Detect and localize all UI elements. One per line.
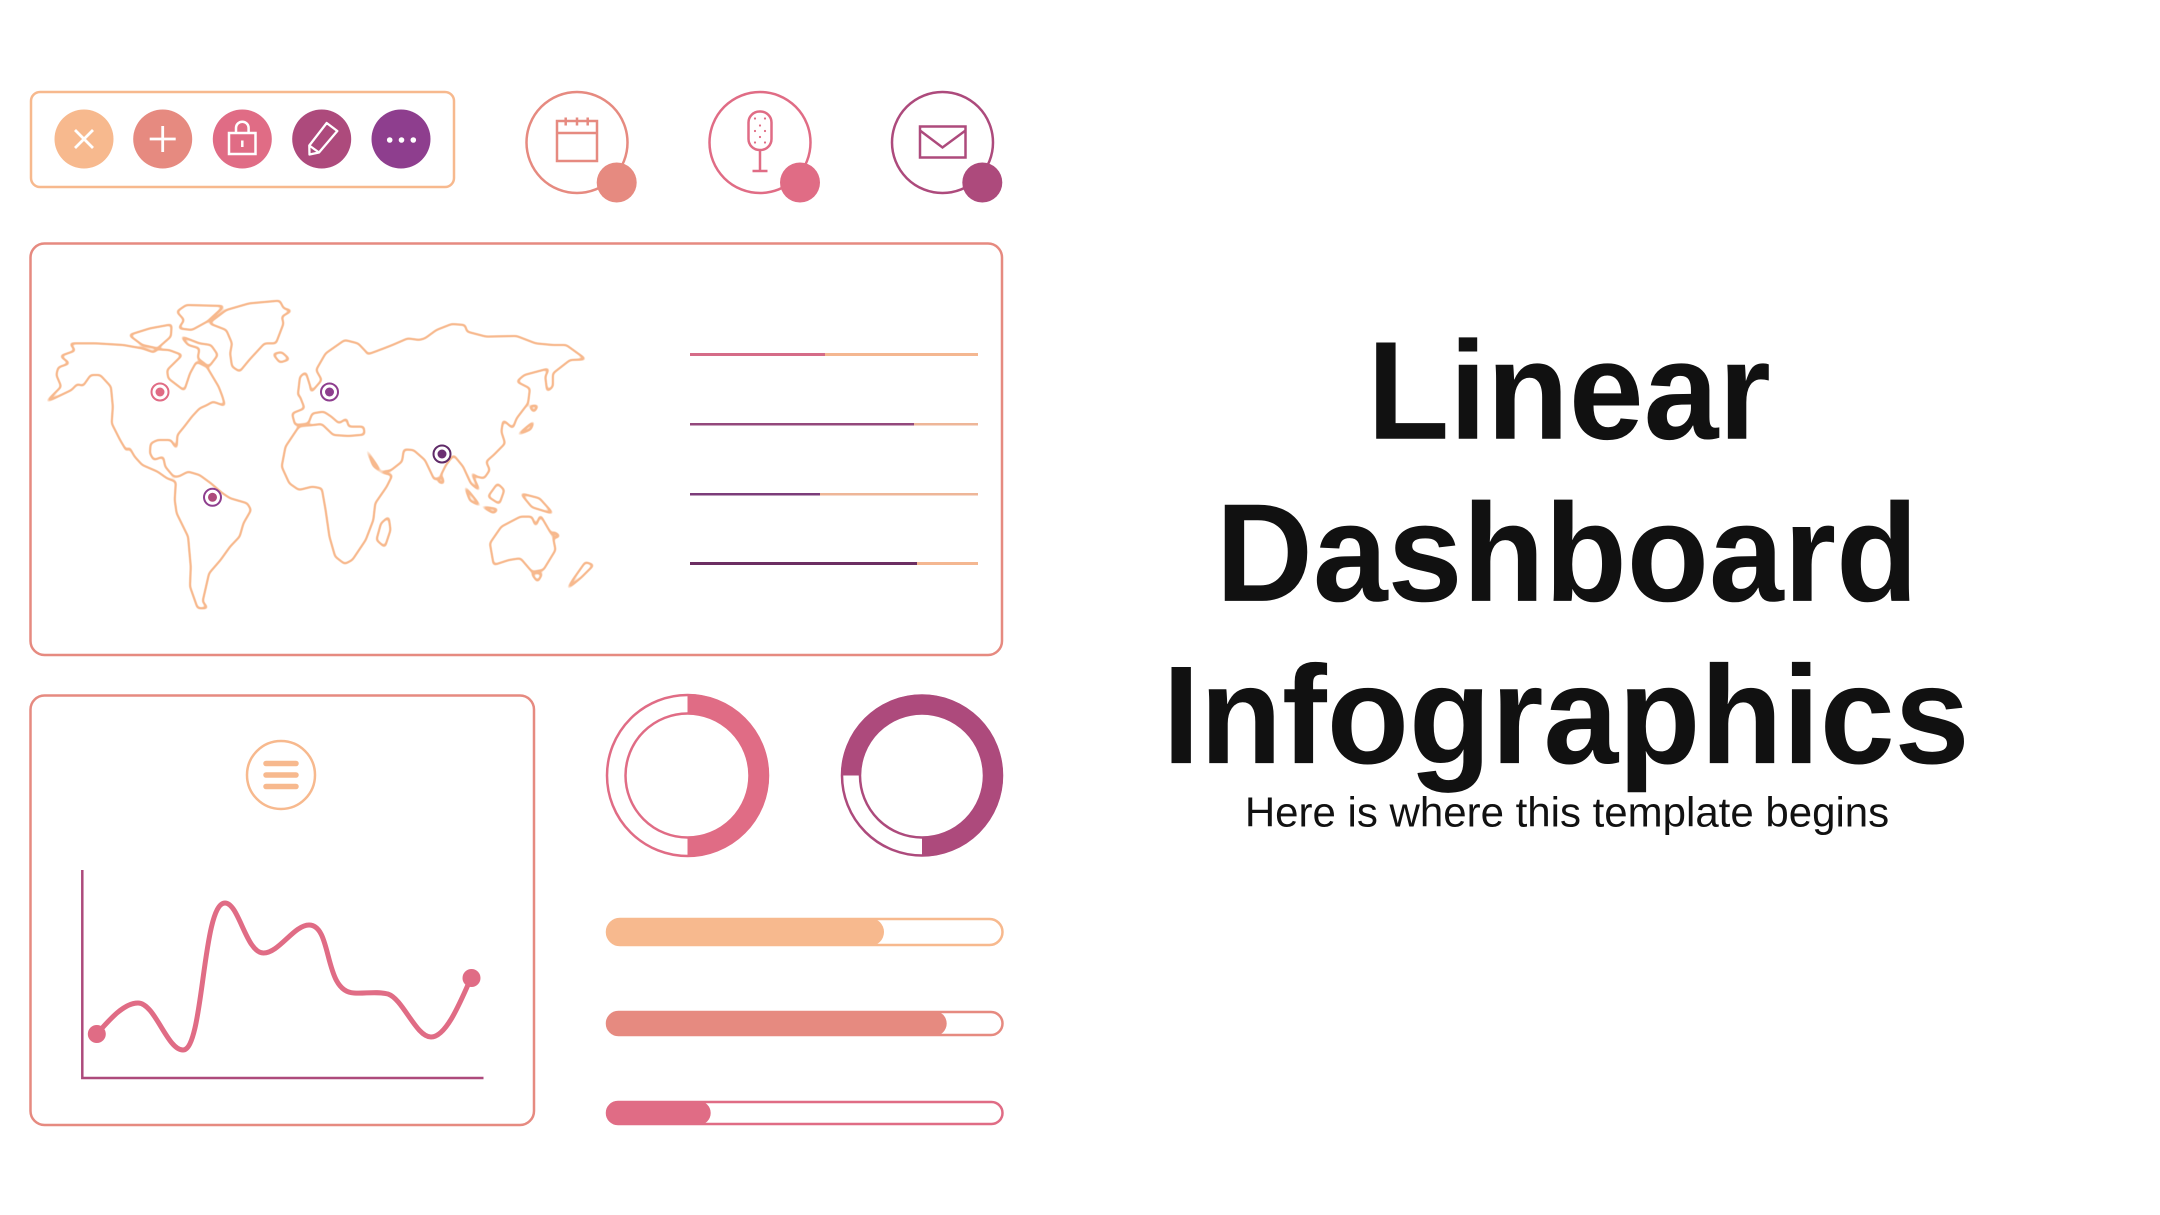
map pin: South America bbox=[204, 489, 221, 506]
donut chart 75 percent bbox=[841, 694, 1003, 856]
stat line 2 bbox=[690, 423, 978, 426]
icon: microphone badge bbox=[710, 92, 820, 202]
icon: add button bbox=[133, 110, 192, 168]
chart line with end points bbox=[88, 903, 481, 1050]
stat line 1 bbox=[690, 353, 978, 356]
progress bar 3 bbox=[606, 1101, 1002, 1125]
progress bar 1 bbox=[606, 918, 1002, 946]
panel: line chart bbox=[30, 696, 534, 1125]
title: Dashboard bbox=[1216, 476, 1918, 632]
icon: envelope badge bbox=[892, 92, 1002, 202]
stat line 4 bbox=[690, 562, 978, 565]
progress bar 2 bbox=[606, 1011, 1002, 1036]
map pin: Europe bbox=[321, 384, 338, 400]
title: Infographics bbox=[1163, 638, 1969, 794]
map pin: North America bbox=[152, 384, 168, 400]
title: Linear bbox=[1367, 313, 1771, 469]
stat line 3 bbox=[690, 493, 978, 496]
donut chart 50 percent bbox=[607, 694, 769, 857]
panel: world map and stat lines bbox=[30, 244, 1002, 655]
icon: more options button bbox=[372, 110, 430, 168]
chart axes bbox=[82, 870, 484, 1078]
icon: menu button bbox=[247, 741, 315, 809]
icon: lock button bbox=[213, 110, 272, 168]
icon: edit pencil button bbox=[292, 110, 351, 168]
subtitle: Here is where this template begins bbox=[1245, 789, 1889, 836]
icon: calendar badge bbox=[526, 92, 637, 202]
icon: close button bbox=[54, 110, 114, 168]
map pin: South Asia bbox=[434, 446, 450, 462]
world map outline bbox=[45, 301, 594, 608]
panel: toolbar with action buttons bbox=[31, 92, 454, 187]
